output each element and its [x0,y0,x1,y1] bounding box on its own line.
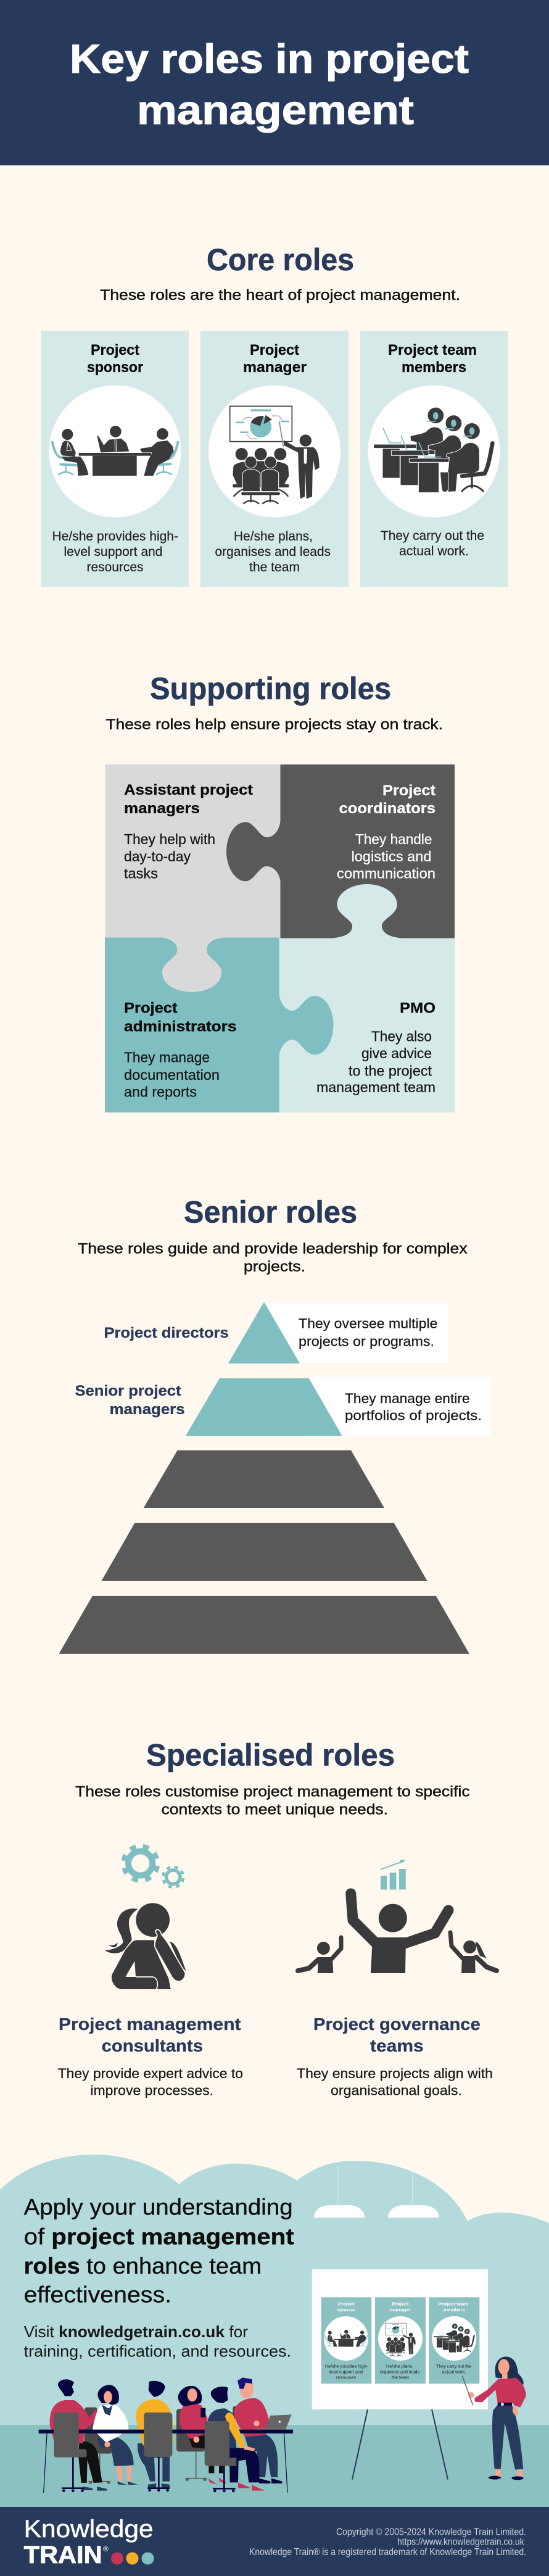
panel: call to action [0,2155,549,2508]
wall background [0,2155,549,2425]
call to action headline: roles to enhance team [24,2253,262,2279]
pyramid tier 5 [59,1596,469,1654]
text: PMO: management team [316,1079,435,1095]
puzzle piece: project coordinators [226,764,455,938]
text: project administrators [124,1000,237,1100]
icon: meeting at a table [52,426,178,476]
description: project directors: They oversee multiple [299,1315,437,1331]
mini card: team members: They carry out the [436,2365,471,2369]
text: assistant project managers: day-to-day [124,848,191,864]
mini card: manager [375,2297,426,2383]
title: management [137,87,414,133]
mini card: sponsor: resources [336,2375,357,2380]
specialised roles intro: These roles customise project management to specific [75,1783,470,1800]
senior roles intro: projects. [244,1259,305,1275]
call to action link text: Visit knowledgetrain.co.uk for [24,2322,248,2341]
person: man in red, back view [50,2379,107,2491]
label: project governance teams: Project governance [313,2015,481,2034]
mini card: manager: organises and leads [380,2371,420,2375]
card text: sponsor: He/she provides high- [52,529,178,544]
person: man in navy vest and yellow sleeve [208,2387,265,2491]
card title: team members [388,342,477,376]
card text: manager: the team [249,560,300,574]
label: senior project managers [75,1383,185,1418]
table [39,2430,293,2493]
card text: manager: He/she plans, [234,529,313,544]
description: governance teams: organisational goals. [331,2083,462,2098]
label: project management consultants: Project management [59,2015,241,2034]
icon: team with raised arms [298,1894,497,1973]
text: project coordinators: communication [337,865,435,881]
person: man in yellow, back view [136,2381,173,2489]
section: specialised roles [58,1738,497,2098]
call to action link text [24,2322,291,2361]
text: project coordinators: Project [382,782,435,799]
text: PMO: PMO [400,1000,435,1017]
core roles intro: These roles are the heart of project management. [100,287,460,304]
icon: gears [121,1844,184,1889]
text: PMO: They also [371,1029,432,1045]
label: senior project managers: managers [110,1401,185,1418]
section: supporting roles [105,671,455,1112]
card text: sponsor [52,529,178,574]
text: assistant project managers: tasks [124,865,158,881]
puzzle diagram [105,764,455,1112]
pyramid tier: project directors [228,1302,300,1364]
heading: senior roles: Senior roles [184,1195,357,1230]
text: assistant project managers: managers [124,800,200,817]
description: consultants: improve processes. [90,2083,213,2098]
text: assistant project managers: Assistant project [124,782,253,798]
label: project management consultants: consultants [102,2036,203,2055]
mini card: manager: manager [390,2307,411,2313]
specialised roles intro: contexts to meet unique needs. [162,1801,388,1818]
pyramid chart [59,1302,491,1654]
copyright notice: https://www.knowledgetrain.co.uk [397,2537,524,2547]
description: project directors [299,1315,437,1349]
text: project coordinators: coordinators [339,800,435,817]
heading: core roles: Core roles [207,242,354,277]
heading: supporting roles: Supporting roles [150,671,391,706]
text: project administrators: documentation [124,1067,220,1083]
mini card: sponsor [321,2297,371,2383]
description: consultants: They provide expert advice to [58,2066,243,2081]
mini card: manager: Project [392,2301,409,2307]
logo: Knowledge Train: TRAIN [24,2541,102,2569]
card title: team members: members [402,359,466,376]
text: PMO [316,1000,435,1095]
description: governance teams [297,2066,493,2098]
mini card: manager: He/she plans, [386,2365,413,2369]
heading: specialised roles: Specialised roles [146,1738,395,1773]
text: project administrators: and reports [124,1083,197,1100]
description: project directors: projects or programs. [299,1334,434,1349]
text: project coordinators: They handle [355,831,432,847]
callout box: directors [265,1303,448,1362]
person: woman in white shirt [93,2385,138,2485]
supporting roles intro: These roles help ensure projects stay on track. [106,716,443,733]
header banner [0,0,549,165]
card: project manager [200,331,349,587]
text: project coordinators: logistics and [352,848,432,864]
mini card: team members: actual work. [442,2371,466,2375]
text: project coordinators [337,782,435,881]
person: woman in red with phone [178,2386,227,2485]
call to action headline: effectiveness. [24,2282,171,2308]
card title: team members: Project team [388,342,477,358]
text: PMO: to the project [349,1062,432,1079]
mini card: sponsor: sponsor [337,2307,355,2313]
call to action link text: training, certification, and resources. [24,2342,291,2361]
label: project directors: Project directors [104,1325,229,1341]
background chairs [85,2406,239,2454]
callout box: senior project managers [308,1377,491,1437]
puzzle piece: assistant project managers [105,764,280,992]
mini card: team members: Project team [438,2301,469,2307]
call to action headline [24,2194,294,2308]
logo: Knowledge Train: ® [103,2545,109,2553]
copyright notice: Copyright © 2005-2024 Knowledge Train Limited. [336,2527,526,2537]
title [70,36,469,133]
card text: manager: organises and leads [215,545,331,559]
label: project governance teams: teams [370,2036,424,2055]
card title: project sponsor: sponsor [87,359,143,376]
copyright notice: Knowledge Train® is a registered trademark of Knowledge Train Limited. [249,2547,526,2557]
card text: team: They carry out the [381,529,484,543]
description: governance teams: They ensure projects align with [297,2066,493,2081]
label: project management consultants [59,2015,241,2055]
text: PMO: give advice [361,1045,432,1061]
description: senior project managers [345,1391,482,1423]
label: senior project managers: Senior project [75,1383,181,1399]
card text: team [381,529,484,558]
icon: thinking consultant [105,1903,186,1989]
text: assistant project managers: They help with [124,831,215,847]
floor [0,2425,549,2508]
text: project administrators: administrators [124,1019,237,1035]
description: consultants [58,2066,243,2098]
card text: sponsor: resources [86,560,143,574]
card text: team: actual work. [399,544,469,558]
card: project team members [360,331,508,587]
call to action headline: of project management [24,2224,294,2250]
card text: sponsor: level support and [64,545,163,559]
person: man in red with laptop [234,2377,292,2483]
section: senior roles [59,1195,491,1654]
card title: project manager: Project [250,342,299,358]
mini card: sponsor: He/she provides high- [325,2365,368,2369]
logo: Knowledge Train [24,2516,154,2569]
front chairs [54,2412,236,2466]
card: project sponsor [41,331,189,587]
pyramid tier 4 [102,1523,427,1581]
footer [0,2507,549,2576]
text: project administrators: Project [124,1000,178,1017]
ceiling lamps [314,2166,439,2218]
mini card: manager: the team [392,2375,409,2380]
puzzle piece: project administrators [105,938,334,1112]
mini card: sponsor: level support and [329,2371,363,2375]
card text: manager [215,529,331,574]
mini card: sponsor: Project [338,2301,355,2307]
title: Key roles in project [70,36,469,81]
logo: Knowledge Train: Knowledge [24,2516,154,2543]
illustration: team at table [39,2377,293,2493]
text: assistant project managers [124,782,253,881]
card title: project sponsor: Project [91,342,139,358]
pyramid tier: senior project managers [186,1378,342,1436]
illustration: presentation board [312,2269,488,2479]
icon: growth chart [381,1860,406,1889]
icon: manager presenting [230,406,320,503]
description: senior project managers: They manage entire [345,1391,470,1406]
card title: project manager [243,342,307,376]
senior roles intro: These roles guide and provide leadership for complex [78,1241,468,1257]
illustration: presenter [462,2356,526,2480]
card title: project sponsor [87,342,143,376]
description: senior project managers: portfolios of projects. [345,1408,482,1423]
specialised roles intro [75,1783,470,1818]
pyramid tier 3 [144,1450,384,1508]
text: project administrators: They manage [124,1050,210,1066]
call to action headline: Apply your understanding [24,2194,293,2220]
icon: team at desks [374,407,492,492]
label: project governance teams [313,2015,481,2055]
copyright notice [249,2527,526,2557]
section: core roles [41,242,508,587]
puzzle piece: PMO [279,884,455,1112]
senior roles intro [78,1241,468,1275]
mini card: team members: members [444,2307,465,2313]
mini card: team members [429,2297,479,2383]
card title: project manager: manager [243,359,307,376]
